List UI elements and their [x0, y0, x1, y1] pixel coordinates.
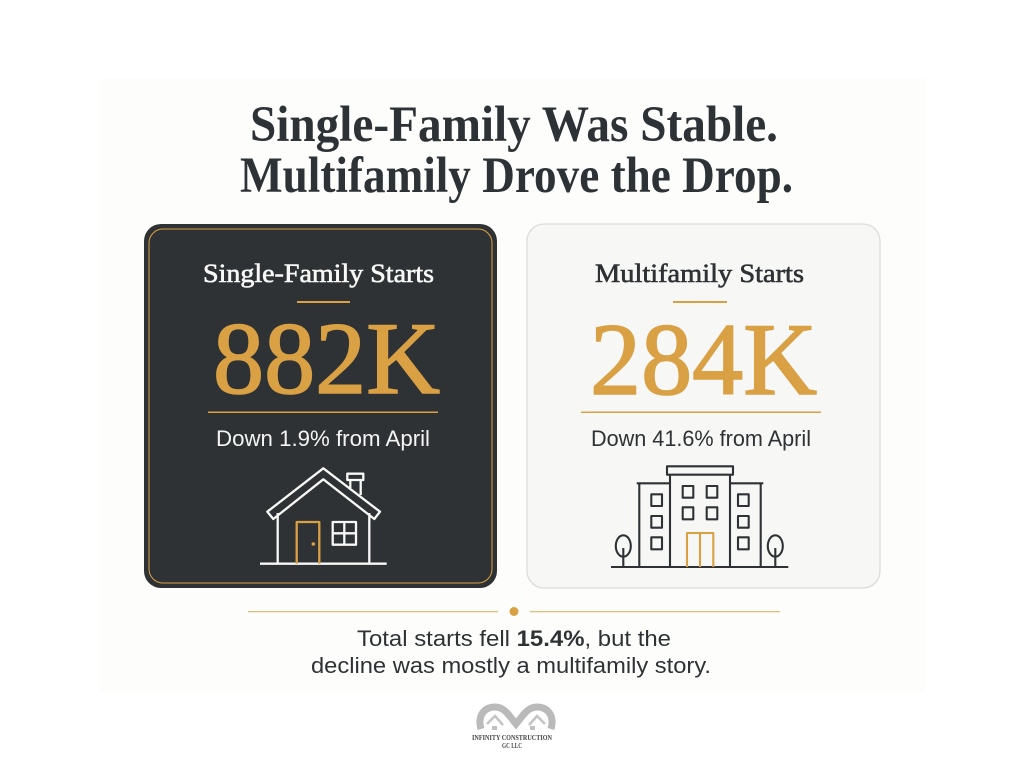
panel: single-family starts — [144, 224, 497, 588]
logo: Infinity Construction GC LLC: GC LLC — [502, 742, 522, 750]
title: Single-Family Was Stable. — [250, 97, 778, 153]
icon: house — [260, 468, 387, 564]
summary text: decline was mostly a multifamily story. — [311, 653, 711, 678]
summary text: Total starts fell 15.4% , but the — [357, 626, 671, 651]
value: 284K: 284K — [590, 303, 817, 417]
change: down 1.9%: Down 1.9% from April — [216, 426, 430, 451]
title: Multifamily Drove the Drop. — [240, 148, 793, 204]
title — [240, 97, 793, 204]
heading: single-family starts: Single-Family Starts — [203, 259, 434, 288]
icon: apartment building — [611, 466, 788, 567]
value: 882K: 882K — [213, 302, 440, 416]
heading: multifamily starts: Multifamily Starts — [595, 259, 804, 288]
summary text — [311, 626, 711, 678]
panel: multifamily starts — [527, 224, 880, 588]
divider — [248, 607, 780, 616]
logo: Infinity Construction GC LLC: INFINITY CONSTRUCTION — [472, 734, 552, 742]
logo: Infinity Construction GC LLC — [472, 707, 552, 750]
change: down 41.6%: Down 41.6% from April — [591, 426, 811, 451]
